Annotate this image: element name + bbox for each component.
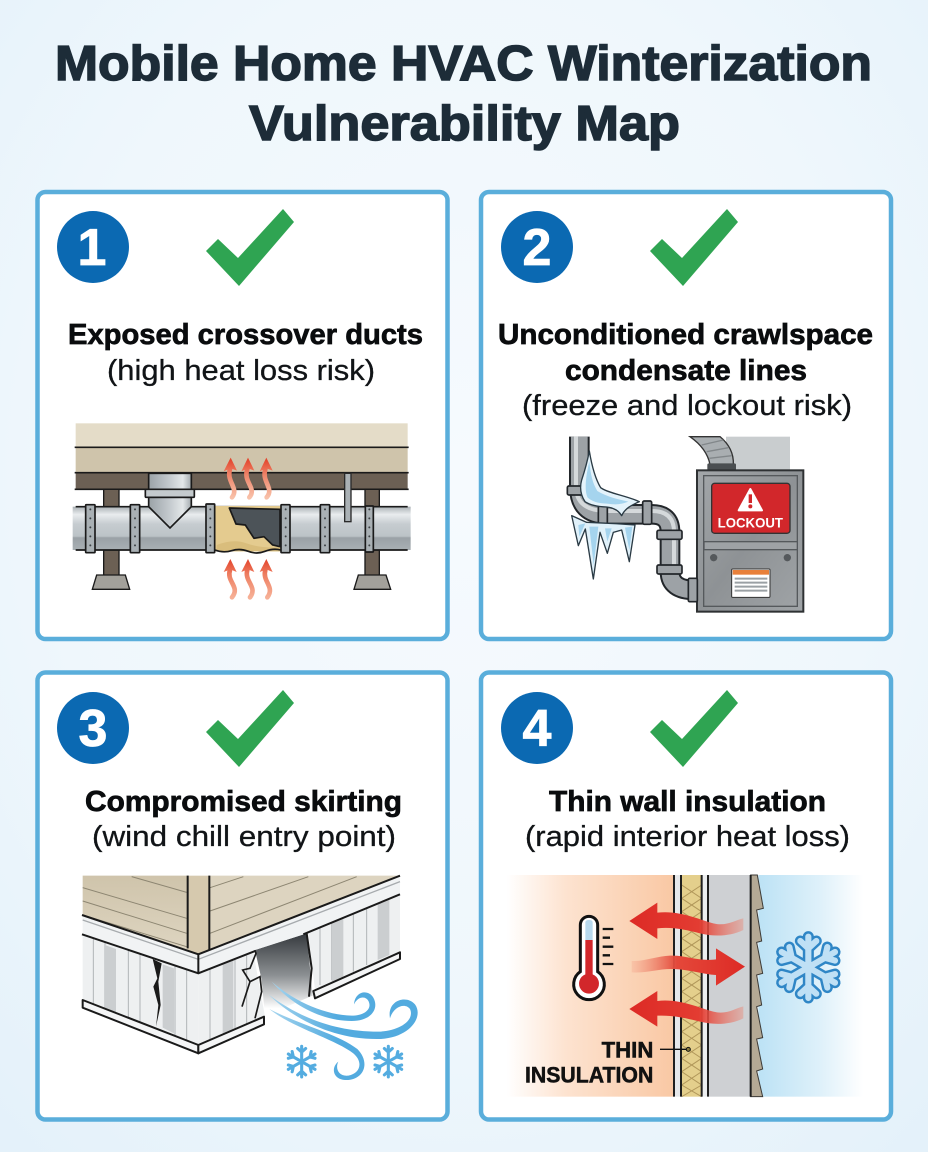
trim band bbox=[82, 876, 400, 973]
warm interior bbox=[507, 875, 674, 1097]
icon: check mark bbox=[206, 690, 294, 767]
lockout warning panel: LOCKOUT bbox=[718, 514, 783, 530]
furnace cabinet bbox=[697, 470, 803, 612]
heat arrows below duct bbox=[224, 559, 273, 597]
illustration: frozen pipe and furnace lockout bbox=[567, 437, 803, 612]
heading: Exposed crossover ducts bbox=[68, 319, 423, 351]
subheading: (freeze and lockout risk) bbox=[522, 390, 852, 422]
panel: thin wall insulation bbox=[481, 672, 891, 1120]
lockout warning panel bbox=[712, 483, 790, 533]
wall layers bbox=[673, 875, 763, 1097]
vertical connector bbox=[145, 473, 194, 528]
cold exterior bbox=[758, 875, 863, 1097]
hole in skirting bbox=[255, 933, 313, 1017]
panel: compromised skirting bbox=[38, 672, 448, 1120]
thin insulation callout bbox=[525, 1038, 690, 1087]
panel: exposed crossover ducts bbox=[38, 192, 448, 639]
house siding bbox=[83, 876, 400, 954]
bottom rails bbox=[83, 952, 400, 1053]
skirting front face bbox=[198, 894, 400, 1045]
number badge 1 bbox=[57, 211, 129, 283]
heading: Unconditioned crawlspace bbox=[498, 319, 873, 351]
thermometer bbox=[574, 916, 613, 1000]
cold snowflake bbox=[782, 937, 835, 998]
panel: crawlspace condensate lines bbox=[481, 192, 891, 639]
number badge 2 bbox=[501, 211, 573, 283]
subheading: (rapid interior heat loss) bbox=[525, 821, 850, 853]
number badge 2: 2 bbox=[523, 219, 551, 277]
heading: Thin wall insulation bbox=[549, 786, 826, 818]
heat arrow bottom bbox=[629, 991, 743, 1027]
hanger strap bbox=[345, 473, 351, 522]
duct body bbox=[73, 507, 411, 550]
condensate pipe bbox=[576, 437, 695, 590]
icon: check mark bbox=[650, 690, 738, 767]
support posts bbox=[92, 489, 391, 589]
torn insulation section bbox=[214, 506, 281, 551]
thin insulation callout: THIN bbox=[602, 1038, 653, 1063]
illustration: wall cross-section bbox=[507, 875, 863, 1097]
illustration: crossover duct with torn insulation bbox=[73, 423, 411, 597]
number badge 3 bbox=[57, 692, 129, 764]
wind swirls bbox=[268, 982, 418, 1080]
furnace label bbox=[732, 569, 770, 597]
illustration: damaged skirting with wind bbox=[82, 876, 418, 1080]
number badge 4 bbox=[501, 692, 573, 764]
ice on pipe bbox=[581, 451, 639, 516]
skirting left face bbox=[83, 934, 198, 1053]
exhaust duct bbox=[690, 437, 790, 471]
heat arrow top bbox=[629, 903, 743, 939]
icon: check mark bbox=[206, 209, 294, 286]
thin insulation callout: INSULATION bbox=[525, 1062, 653, 1087]
icon: check mark bbox=[650, 209, 738, 286]
heading: condensate lines bbox=[565, 355, 807, 387]
pipe couplings bbox=[567, 486, 697, 602]
subheading: (wind chill entry point) bbox=[92, 821, 396, 853]
icicles bbox=[572, 516, 635, 579]
snowflake left bbox=[288, 1046, 315, 1077]
heat arrow middle bbox=[632, 948, 745, 986]
heat arrows rising above duct bbox=[224, 458, 273, 497]
duct straps bbox=[86, 504, 373, 553]
snowflake right bbox=[375, 1046, 402, 1077]
title bbox=[55, 37, 872, 151]
title: Mobile Home HVAC Winterization bbox=[55, 37, 872, 91]
heading: Compromised skirting bbox=[85, 786, 402, 818]
number badge 3: 3 bbox=[79, 700, 107, 758]
heading bbox=[498, 319, 873, 387]
number badge 4: 4 bbox=[523, 700, 552, 758]
number badge 1: 1 bbox=[78, 219, 106, 277]
subheading: (high heat loss risk) bbox=[107, 355, 375, 387]
title: Vulnerability Map bbox=[249, 97, 680, 151]
